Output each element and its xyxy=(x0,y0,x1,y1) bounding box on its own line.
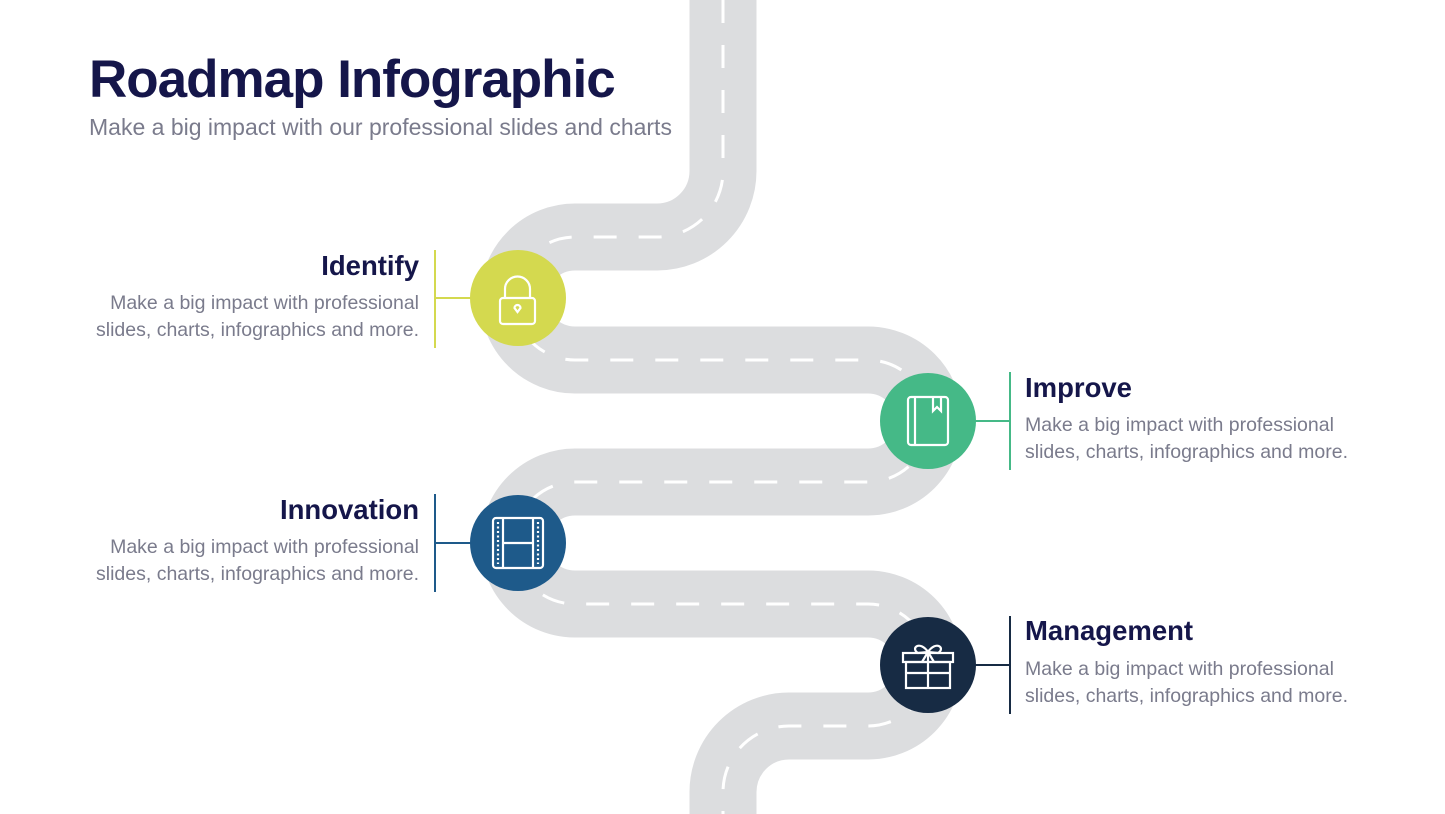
text: Make a big impact with professional xyxy=(110,536,419,558)
text: slides, charts, infographics and more. xyxy=(1025,441,1348,463)
text: innovation xyxy=(96,494,419,585)
text: slides, charts, infographics and more. xyxy=(1025,685,1348,707)
subtitle: Make a big impact with our professional slides and charts xyxy=(89,114,672,140)
text: slides, charts, infographics and more. xyxy=(96,319,419,341)
marker: identify xyxy=(435,250,566,348)
text: slides, charts, infographics and more. xyxy=(96,563,419,585)
title: Roadmap Infographic xyxy=(89,50,615,109)
text: Innovation xyxy=(280,494,419,525)
text: Make a big impact with professional xyxy=(1025,414,1334,436)
text: Management xyxy=(1025,615,1193,646)
marker: improve xyxy=(880,372,1010,470)
marker: management xyxy=(880,616,1010,714)
text: Identify xyxy=(321,250,419,281)
text: improve xyxy=(1025,372,1348,463)
text: management xyxy=(1025,615,1348,707)
marker: innovation xyxy=(435,494,566,592)
text: identify xyxy=(96,250,419,341)
text: Improve xyxy=(1025,372,1132,403)
text: Make a big impact with professional xyxy=(110,292,419,314)
text: Make a big impact with professional xyxy=(1025,658,1334,680)
